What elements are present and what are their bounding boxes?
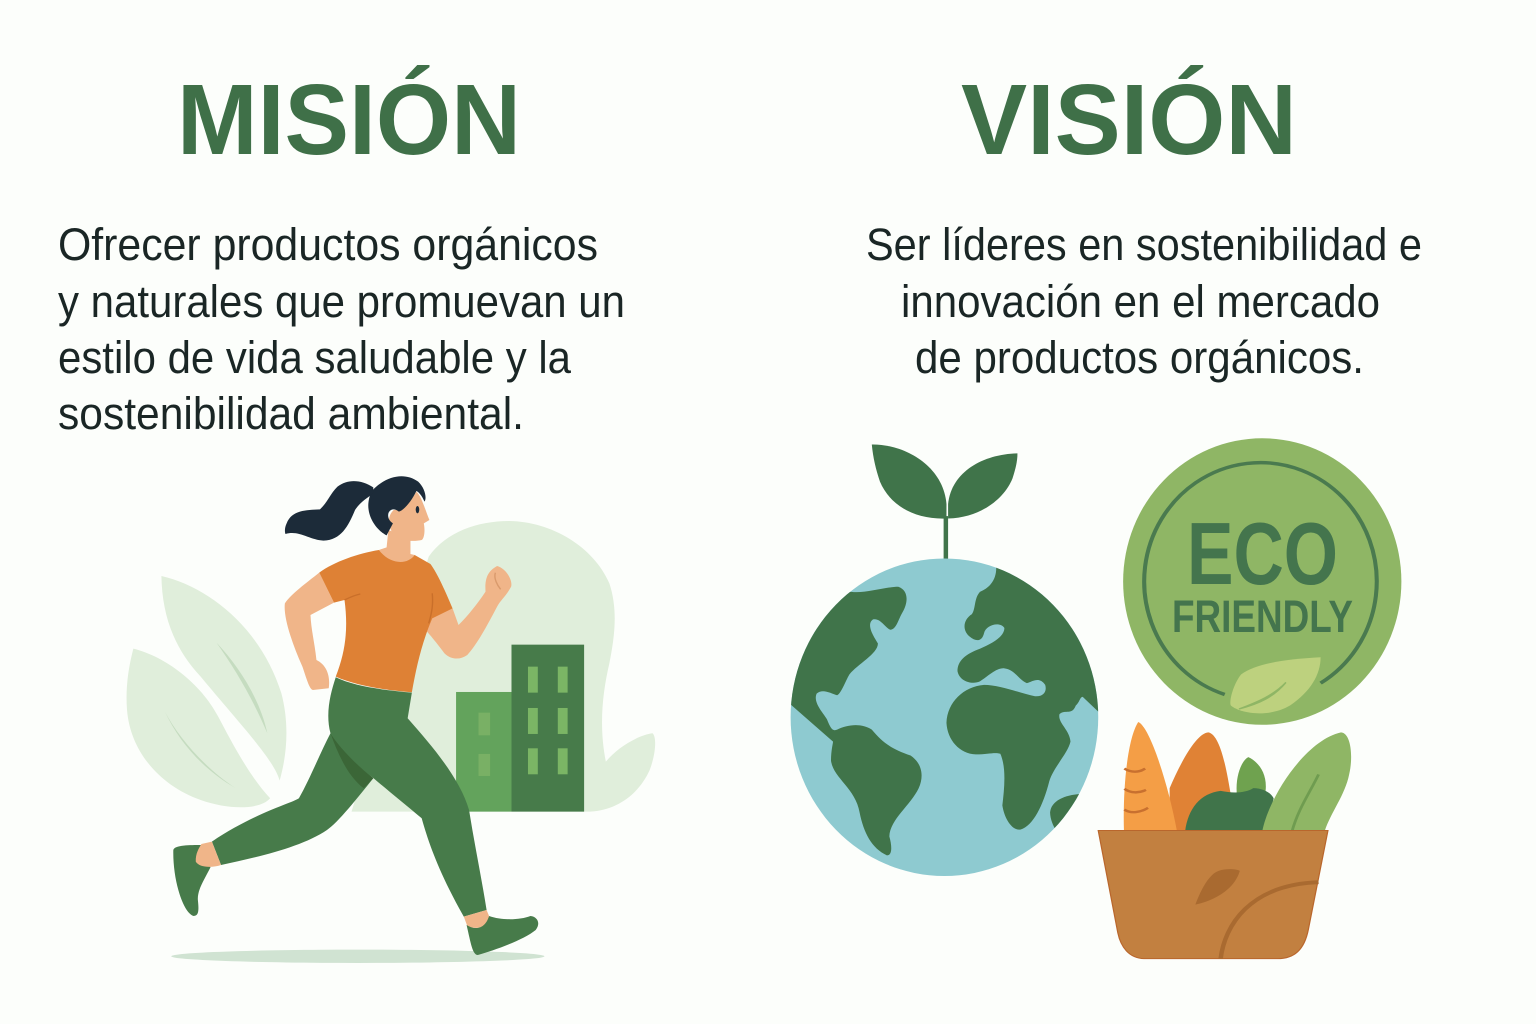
text block: mission statement: estilo de vida saludable y la	[58, 332, 572, 383]
illustration: basket of vegetables	[1098, 722, 1351, 959]
background blob	[352, 521, 655, 812]
shirt	[319, 550, 453, 692]
badge disc	[1123, 438, 1401, 725]
leaf: lower	[127, 649, 270, 807]
ponytail	[285, 481, 373, 541]
text block: mission statement: y naturales que promuevan un	[58, 276, 625, 327]
panel: vision	[780, 64, 1422, 959]
orange vegetable	[1170, 732, 1231, 831]
panel: mission	[58, 64, 655, 963]
runner	[173, 476, 538, 955]
front ankle	[464, 910, 489, 928]
illustration: globe with sprout	[780, 444, 1106, 876]
front leg and hips	[328, 677, 487, 917]
carrot	[1124, 722, 1177, 831]
text block: vision statement: innovación en el mercado	[901, 276, 1380, 327]
text block: mission statement: Ofrecer productos orgánicos	[58, 219, 598, 270]
face	[389, 492, 429, 541]
front arm	[427, 566, 511, 659]
heading: VISIÓN: VISIÓN	[961, 64, 1297, 176]
basket	[1098, 831, 1328, 959]
back ankle	[196, 842, 221, 867]
green vegetable	[1185, 788, 1274, 831]
leaf: upper	[161, 576, 286, 781]
small leaf	[1237, 757, 1266, 795]
text block: vision statement	[866, 219, 1422, 383]
badge leaf	[1230, 657, 1321, 713]
leg shadow	[330, 733, 373, 788]
shirt folds	[345, 593, 433, 623]
back leg	[212, 733, 373, 865]
text block: vision statement: Ser líderes en sostenibilidad e	[866, 219, 1422, 270]
illustration: runner with city and leaves	[127, 476, 655, 963]
back arm	[285, 573, 334, 690]
sprout	[872, 444, 1017, 559]
neck	[379, 530, 415, 573]
front shoe	[467, 916, 538, 955]
hair	[368, 476, 426, 535]
globe continents	[780, 561, 1106, 855]
globe ocean	[791, 558, 1098, 876]
fist detail	[495, 573, 501, 589]
badge ring	[1144, 463, 1377, 694]
text block: vision statement: de productos orgánicos.	[915, 332, 1364, 383]
eye	[416, 506, 419, 513]
buildings	[456, 645, 584, 812]
badge text: FRIENDLY: FRIENDLY	[1172, 591, 1353, 642]
heading: MISIÓN: MISIÓN	[177, 64, 521, 176]
badge: eco friendly	[1123, 438, 1401, 725]
text block: mission statement	[58, 219, 625, 439]
text block: mission statement: sostenibilidad ambiental.	[58, 388, 524, 439]
ground shadow	[171, 950, 544, 963]
badge text: ECO: ECO	[1187, 504, 1338, 603]
back shoe	[173, 845, 211, 916]
large leaf	[1262, 732, 1351, 831]
